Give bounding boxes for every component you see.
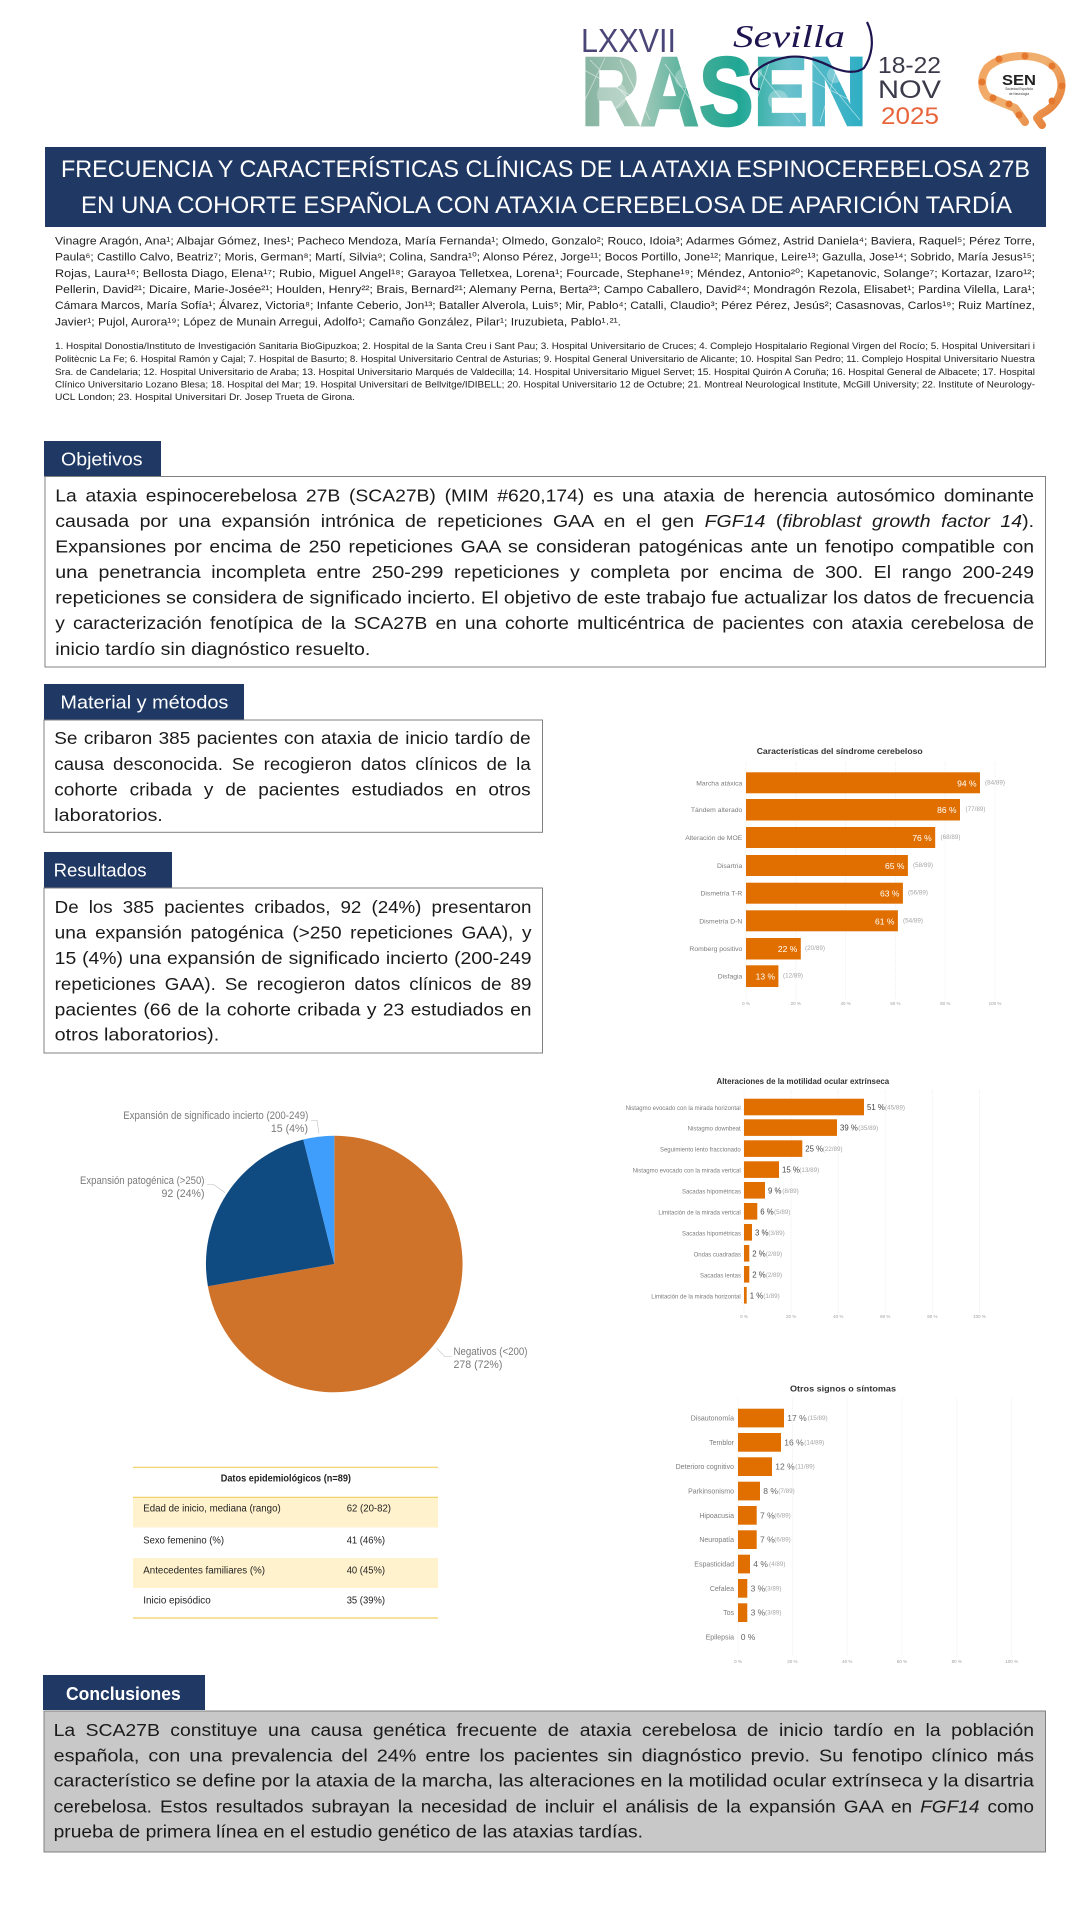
bar: marcha atáxica: (84/89) bbox=[985, 779, 1005, 786]
text: resultados body: De los 385 pacientes cribados, 92 (24%) presentaron bbox=[55, 897, 531, 917]
axis: chart 2 ticks: 20 % bbox=[786, 1314, 796, 1319]
authors: Pellerin, David²¹; Dicaire, Marie-Josée²¹; Houlden, Henry²²; Brais, Bernard²¹; Alemany Perna, Berta²³; Campo Caballero, David²⁴; Mondragón Rezola, Elisabet¹; Pardina Vilella, Lara¹; bbox=[55, 284, 1035, 296]
affiliations bbox=[55, 341, 1036, 402]
authors: Paula⁶; Castillo Calvo, Beatriz⁷; Moris, German⁸; Martí, Silvia⁹; Colina, Sandra¹⁰; Alonso Pérez, Jorge¹¹; Bocos Portillo, Jone¹²; Manrique, Leire¹³; Gazulla, Jose¹⁴; Sobrido, María Jesus¹⁵; bbox=[55, 252, 1035, 264]
bar: sacadas lentas: Sacadas lentas bbox=[700, 1273, 741, 1279]
affiliations: Clínico Universitario Lozano Blesa; 18. Hospital del Mar; 19. Hospital Universitari de Bellvitge/IDIBELL; 20. Hospital Universitario 12 de Octubre; 21. Montreal Neurological Institute, McGill University; 22. Institute of Neurology- bbox=[55, 380, 1035, 390]
heading: resultados bbox=[44, 852, 172, 888]
label: negativos bbox=[437, 1346, 528, 1371]
chart: otros signos o síntomas: Otros signos o síntomas bbox=[790, 1384, 896, 1394]
label: expansión de significado incierto: Expansión de significado incierto (200-249) bbox=[123, 1110, 308, 1122]
affiliations: Politècnic La Fe; 6. Hospital Ramón y Cajal; 7. Hospital de Basurto; 8. Hospital Universitario Central de Asturias; 9. Hospital General Universitario de Alicante; 10. Hospital San Pedro; 11. Complejo Hospital Universitario Nuestra bbox=[55, 354, 1036, 364]
bar: romberg positivo: Romberg positivo bbox=[689, 946, 743, 953]
bar: nistagmo evocado horizontal bbox=[626, 1099, 905, 1115]
bar: sacadas hipométricas 2: 3 % bbox=[755, 1228, 769, 1237]
axis: chart 1 ticks bbox=[742, 1001, 1001, 1006]
logo: LXXVII RASEN Sevilla congress: RASEN bbox=[581, 37, 867, 146]
heading: material y métodos bbox=[44, 684, 244, 720]
logo: SEN brain bbox=[978, 52, 1066, 125]
bar: sacadas hipométricas 2: (3/89) bbox=[768, 1230, 785, 1237]
text: material y métodos body bbox=[54, 728, 531, 825]
logo: LXXVII RASEN Sevilla congress: Sevilla bbox=[733, 18, 845, 54]
bar: romberg positivo: (20/89) bbox=[805, 945, 825, 952]
panel: objetivos bbox=[44, 441, 1046, 667]
table: datos epidemiológicos: 40 (45%) bbox=[347, 1565, 385, 1576]
text: resultados body bbox=[55, 897, 532, 1045]
bar: seguimiento lento fraccionado: 25 % bbox=[805, 1145, 823, 1154]
axis: chart 2 ticks: 60 % bbox=[880, 1314, 890, 1319]
bar: disautonomía: 17 % bbox=[787, 1413, 807, 1423]
bar: dismetría T-R: (56/89) bbox=[908, 890, 928, 897]
axis: chart 3 ticks: 0 % bbox=[734, 1659, 742, 1664]
bar: tándem alterado: 86 % bbox=[937, 805, 957, 815]
chart: alteraciones de la motilidad ocular extrínseca bbox=[626, 1076, 986, 1319]
bar: dismetría T-R: 63 % bbox=[880, 889, 900, 899]
bar: espasticidad: Espasticidad bbox=[694, 1562, 734, 1568]
axis: chart 3 ticks bbox=[734, 1659, 1018, 1664]
bar: cefalea: Cefalea bbox=[710, 1586, 734, 1593]
bar: limitación mirada vertical: Limitación de la mirada vertical bbox=[658, 1210, 741, 1216]
bar: temblor: Temblor bbox=[709, 1440, 735, 1447]
logo: SEN brain: SEN bbox=[1002, 72, 1036, 89]
text: material y métodos body: causa desconocida. Se recogieron datos clínicos de la bbox=[54, 754, 531, 774]
chart: otros signos o síntomas bbox=[676, 1384, 1018, 1664]
text: objetivos body: La ataxia espinocerebelosa 27B (SCA27B) (MIM #620,174) es una ataxia de herencia autosómico dominante bbox=[55, 485, 1034, 505]
bar: sacadas lentas: (2/89) bbox=[766, 1272, 782, 1279]
text: objetivos body: inicio tardío sin diagnóstico resuelto. bbox=[55, 639, 370, 659]
chart: características del síndrome cerebeloso bbox=[685, 746, 1005, 1006]
title banner bbox=[45, 147, 1046, 227]
bar: cefalea bbox=[710, 1579, 781, 1598]
bar: tos: Tos bbox=[723, 1610, 734, 1617]
bar: nistagmo downbeat bbox=[688, 1119, 878, 1136]
bar: neuropatía: (6/89) bbox=[774, 1537, 791, 1544]
bar: epilepsia bbox=[706, 1632, 756, 1642]
label: expansión patogénica: Expansión patogénica (>250) bbox=[80, 1175, 204, 1187]
text: objetivos body: una penetrancia incompleta entre 250-299 repeticiones y completa por encima de 300. El rango 200-249 bbox=[55, 562, 1034, 582]
bar: dismetría T-R: Dismetría T-R bbox=[701, 891, 742, 898]
panel: material y métodos bbox=[44, 684, 542, 832]
bar: temblor: 16 % bbox=[784, 1437, 804, 1447]
bar: hipoacusia: (6/89) bbox=[774, 1512, 791, 1519]
bar: epilepsia: Epilepsia bbox=[706, 1634, 734, 1642]
bar: espasticidad: 4 % bbox=[753, 1559, 768, 1569]
table: datos epidemiológicos: Antecedentes familiares (%) bbox=[143, 1565, 265, 1576]
bar: deterioro cognitivo: (11/89) bbox=[795, 1464, 815, 1471]
bar: nistagmo evocado vertical: 15 % bbox=[782, 1166, 800, 1175]
axis: chart 2 ticks: 100 % bbox=[973, 1314, 986, 1319]
bar: disfagia: Disfagia bbox=[718, 973, 743, 980]
text: resultados body: una expansión patogénica (>250 repeticiones GAA), y bbox=[55, 923, 532, 943]
axis: chart 3 ticks: 20 % bbox=[787, 1659, 798, 1664]
label: negativos: Negativos (<200) bbox=[454, 1346, 528, 1358]
label: expansión de significado incierto: 15 (4%) bbox=[271, 1123, 308, 1135]
bar: cefalea: 3 % bbox=[751, 1583, 766, 1593]
bar: tándem alterado bbox=[691, 799, 985, 820]
logo: SEN brain: Sociedad Española bbox=[1005, 87, 1033, 91]
affiliations: Sra. de Candelaria; 12. Hospital Universitario de Araba; 13. Hospital Universitario Marqués de Valdecilla; 14. Hospital Universitario Miguel Servet; 15. Hospital Quirón A Coruña; 16. Hospital General de Albacete; 17. Hospital bbox=[55, 367, 1035, 377]
bar: nistagmo evocado vertical: (13/89) bbox=[799, 1167, 819, 1174]
bar: tándem alterado: (77/89) bbox=[966, 806, 985, 813]
bar: romberg positivo bbox=[689, 938, 825, 960]
bar: parkinsonismo bbox=[688, 1482, 795, 1500]
bar: ondas cuadradas: (2/89) bbox=[766, 1251, 782, 1258]
bar: dismetría T-R bbox=[701, 883, 928, 904]
axis: chart 2 ticks bbox=[740, 1314, 986, 1319]
axis: chart 1 ticks: 0 % bbox=[742, 1001, 750, 1006]
bar: ondas cuadradas: Ondas cuadradas bbox=[694, 1252, 741, 1258]
bar: sacadas hipométricas: 9 % bbox=[768, 1186, 782, 1195]
slice: expansión patogénica bbox=[206, 1140, 334, 1286]
authors: Rojas, Laura¹⁶; Bellosta Diago, Elena¹⁷; Rubio, Miguel Angel¹⁸; Garayoa Telletxea, Lorena¹; Fourcade, Stephane¹⁹; Méndez, Antonio²⁰; Kapetanovic, Solange⁷; Kortazar, Izaro¹²; bbox=[55, 268, 1035, 280]
bar: tos: 3 % bbox=[751, 1608, 766, 1618]
bar: ondas cuadradas: 2 % bbox=[752, 1249, 766, 1258]
axis: chart 3 ticks: 60 % bbox=[897, 1659, 907, 1664]
bar: neuropatía: Neuropatía bbox=[699, 1537, 734, 1544]
bar: sacadas hipométricas: (8/89) bbox=[782, 1188, 799, 1195]
table: datos epidemiológicos: 41 (46%) bbox=[347, 1535, 385, 1546]
bar: epilepsia: 0 % bbox=[741, 1632, 756, 1642]
bar: hipoacusia: Hipoacusia bbox=[699, 1513, 734, 1520]
chart: alteraciones de la motilidad ocular extrínseca: Alteraciones de la motilidad ocular extrínseca bbox=[716, 1076, 889, 1086]
axis: chart 2 ticks: 0 % bbox=[740, 1314, 748, 1319]
axis: chart 1 ticks: 60 % bbox=[890, 1001, 901, 1006]
bar: tándem alterado: Tándem alterado bbox=[691, 807, 743, 814]
text: conclusiones body: La SCA27B constituye una causa genética frecuente de ataxia cerebelosa de inicio tardío en la población bbox=[54, 1720, 1034, 1740]
table: datos epidemiológicos bbox=[133, 1467, 438, 1618]
text: objetivos body: Expansiones por encima de 250 repeticiones GAA se consideran patogénicas ante un fenotipo compatible con bbox=[55, 536, 1034, 556]
bar: alteración de MOE: 76 % bbox=[912, 833, 932, 843]
table: datos epidemiológicos: 62 (20-82) bbox=[347, 1504, 391, 1515]
bar: disautonomía: Disautonomía bbox=[691, 1416, 734, 1422]
bar: limitación mirada horizontal bbox=[651, 1287, 780, 1304]
table: datos epidemiológicos: 35 (39%) bbox=[347, 1595, 385, 1606]
bar: sacadas lentas: 2 % bbox=[752, 1270, 766, 1279]
bar: disfagia: (12/89) bbox=[783, 972, 803, 979]
bar: dismetría D-N: (54/89) bbox=[903, 917, 923, 924]
slice: negativos bbox=[208, 1136, 463, 1392]
bar: limitación mirada vertical: (5/89) bbox=[774, 1209, 790, 1216]
bar: sacadas hipométricas: Sacadas hipométricas bbox=[682, 1189, 741, 1195]
title banner: EN UNA COHORTE ESPAÑOLA CON ATAXIA CEREBELOSA DE APARICIÓN TARDÍA bbox=[81, 192, 1012, 219]
heading: conclusiones: Conclusiones bbox=[66, 1683, 181, 1704]
bar: nistagmo evocado vertical bbox=[633, 1161, 819, 1178]
bar: sacadas hipométricas bbox=[682, 1182, 799, 1199]
text: conclusiones body: característico se define por la ataxia de la marcha, las alteraciones en la motilidad ocular extrínseca y la disartria bbox=[54, 1771, 1034, 1791]
text: conclusiones body: española, con una prevalencia del 24% entre los pacientes sin diagnóstico previo. Su fenotipo clínico más bbox=[54, 1745, 1034, 1765]
text: conclusiones body bbox=[54, 1720, 1034, 1842]
bar: cefalea: (3/89) bbox=[765, 1585, 781, 1592]
bar: disfagia bbox=[718, 965, 803, 987]
logo: LXXVII RASEN Sevilla congress: NOV bbox=[878, 76, 941, 104]
bar: nistagmo evocado horizontal: Nistagmo evocado con la mirada horizontal bbox=[626, 1106, 741, 1112]
authors: Vinagre Aragón, Ana¹; Albajar Gómez, Ines¹; Pacheco Mendoza, María Fernanda¹; Olmedo, Gonzalo²; Rouco, Idoia³; Adarmes Gómez, Astrid Daniela⁴; Baviera, Raquel⁵; Pérez Torre, bbox=[55, 236, 1035, 248]
title banner: FRECUENCIA Y CARACTERÍSTICAS CLÍNICAS DE LA ATAXIA ESPINOCEREBELOSA 27B bbox=[61, 156, 1030, 183]
bar: alteración de MOE bbox=[685, 827, 960, 848]
text: material y métodos body: Se cribaron 385 pacientes con ataxia de inicio tardío de bbox=[54, 728, 531, 748]
bar: disautonomía: (15/89) bbox=[808, 1415, 828, 1422]
bar: hipoacusia: 7 % bbox=[760, 1510, 775, 1520]
axis: chart 1 ticks: 40 % bbox=[840, 1001, 851, 1006]
bar: seguimiento lento fraccionado: (22/89) bbox=[823, 1146, 843, 1153]
axis: chart 2 ticks: 80 % bbox=[927, 1314, 938, 1319]
authors bbox=[55, 236, 1035, 328]
bar: seguimiento lento fraccionado bbox=[660, 1140, 843, 1157]
chart: pie cohort bbox=[80, 1110, 528, 1392]
text: resultados body: pacientes (66 de la cohorte cribada y 23 estudiados en bbox=[55, 999, 531, 1019]
bar: parkinsonismo: Parkinsonismo bbox=[688, 1488, 734, 1496]
bar: dismetría D-N: Dismetría D-N bbox=[699, 918, 742, 925]
bar: parkinsonismo: (7/89) bbox=[778, 1488, 795, 1495]
authors: Javier¹; Pujol, Aurora¹⁹; López de Munain Arregui, Adolfo¹; Camaño González, Pilar¹; Iruzubieta, Pablo¹˒²¹. bbox=[55, 316, 621, 328]
bar: dismetría D-N: 61 % bbox=[875, 916, 895, 926]
bar: deterioro cognitivo: 12 % bbox=[775, 1462, 795, 1472]
bar: nistagmo downbeat: 39 % bbox=[840, 1124, 858, 1133]
slice: expansión de significado incierto bbox=[303, 1136, 334, 1264]
panel: conclusiones bbox=[43, 1675, 1046, 1852]
logo: LXXVII RASEN Sevilla congress: LXXVII bbox=[581, 22, 676, 59]
text: objetivos body bbox=[55, 485, 1034, 659]
heading: resultados: Resultados bbox=[54, 860, 147, 881]
bar: seguimiento lento fraccionado: Seguimiento lento fraccionado bbox=[660, 1148, 741, 1154]
bar: marcha atáxica: Marcha atáxica bbox=[696, 780, 743, 787]
bar: parkinsonismo: 8 % bbox=[763, 1486, 778, 1496]
heading: conclusiones bbox=[43, 1675, 205, 1710]
bar: alteración de MOE: Alteración de MOE bbox=[685, 835, 743, 842]
table: datos epidemiológicos: Inicio episódico bbox=[143, 1595, 211, 1606]
bar: nistagmo downbeat: Nistagmo downbeat bbox=[688, 1127, 741, 1133]
affiliations: UCL London; 23. Hospital Universitari Dr. Josep Trueta de Girona. bbox=[55, 392, 355, 402]
bar: disartria: Disartria bbox=[717, 863, 743, 870]
bar: limitación mirada vertical bbox=[658, 1203, 790, 1220]
bar: espasticidad: (4/89) bbox=[769, 1561, 785, 1568]
text: objetivos body: repeticiones se considera de significado incierto. El objetivo de este trabajo fue actualizar los datos de frecuencia bbox=[55, 587, 1034, 607]
axis: chart 3 ticks: 100 % bbox=[1005, 1659, 1018, 1664]
chart: características del síndrome cerebeloso: Características del síndrome cerebeloso bbox=[757, 746, 923, 756]
bar: tos bbox=[723, 1603, 781, 1622]
heading: objetivos: Objetivos bbox=[61, 449, 142, 470]
bar: neuropatía bbox=[699, 1530, 791, 1549]
label: expansión de significado incierto bbox=[123, 1110, 319, 1135]
logo: LXXVII RASEN Sevilla congress: 2025 bbox=[881, 103, 939, 130]
bar: nistagmo evocado vertical: Nistagmo evocado con la mirada vertical bbox=[633, 1169, 741, 1175]
text: resultados body: repeticiones GAA). Se recogieron datos clínicos de 89 bbox=[55, 974, 531, 994]
text: material y métodos body: laboratorios. bbox=[54, 805, 163, 825]
logo: LXXVII RASEN Sevilla congress: 18-22 bbox=[878, 52, 941, 78]
axis: chart 3 ticks: 40 % bbox=[842, 1659, 852, 1664]
bar: sacadas hipométricas 2: Sacadas hipométricas bbox=[682, 1231, 741, 1237]
text: resultados body: 15 (4%) una expansión de significado incierto (200-249 bbox=[55, 948, 531, 968]
axis: chart 1 ticks: 100 % bbox=[989, 1001, 1001, 1006]
bar: disartria: 65 % bbox=[885, 861, 905, 871]
bar: sacadas hipométricas 2 bbox=[682, 1224, 785, 1241]
bar: tos: (3/89) bbox=[765, 1610, 781, 1617]
bar: disfagia: 13 % bbox=[756, 971, 775, 981]
bar: nistagmo evocado horizontal: 51 % bbox=[867, 1103, 885, 1112]
bar: alteración de MOE: (68/89) bbox=[940, 834, 960, 841]
bar: marcha atáxica bbox=[696, 772, 1005, 793]
axis: chart 1 ticks: 80 % bbox=[940, 1001, 950, 1006]
bar: temblor: (14/89) bbox=[804, 1439, 824, 1446]
bar: temblor bbox=[709, 1433, 824, 1452]
bar: ondas cuadradas bbox=[694, 1245, 782, 1262]
bar: disautonomía bbox=[691, 1409, 828, 1427]
logo: SEN brain: de Neurología bbox=[1009, 92, 1029, 96]
bar: neuropatía: 7 % bbox=[760, 1535, 775, 1545]
bar: limitación mirada vertical: 6 % bbox=[760, 1207, 774, 1216]
bar: limitación mirada horizontal: Limitación de la mirada horizontal bbox=[651, 1294, 741, 1300]
table: datos epidemiológicos: Datos epidemiológicos (n=89) bbox=[221, 1474, 351, 1485]
bar: deterioro cognitivo: Deterioro cognitivo bbox=[676, 1464, 734, 1471]
bar: deterioro cognitivo bbox=[676, 1457, 815, 1476]
bar: limitación mirada horizontal: 1 % bbox=[750, 1291, 763, 1300]
heading: objetivos bbox=[44, 441, 161, 476]
bar: marcha atáxica: 94 % bbox=[957, 778, 977, 788]
label: negativos: 278 (72%) bbox=[454, 1359, 502, 1371]
bar: sacadas lentas bbox=[700, 1266, 782, 1283]
bar: nistagmo evocado horizontal: (45/89) bbox=[885, 1104, 905, 1112]
text: objetivos body: causada por una expansión intrónica de repeticiones GAA en el gen FGF14 (fibroblast growth factor 14 ). bbox=[55, 511, 1034, 531]
label: expansión patogénica bbox=[80, 1175, 225, 1200]
axis: chart 3 ticks: 80 % bbox=[952, 1659, 962, 1664]
table: datos epidemiológicos: Sexo femenino (%) bbox=[143, 1535, 224, 1546]
bar: disartria: (58/89) bbox=[913, 862, 933, 869]
text: resultados body: otros laboratorios). bbox=[55, 1025, 219, 1045]
heading: material y métodos: Material y métodos bbox=[60, 691, 228, 712]
axis: chart 2 ticks: 40 % bbox=[833, 1314, 843, 1319]
affiliations: 1. Hospital Donostia/Instituto de Investigación Sanitaria BioGipuzkoa; 2. Hospital de la Santa Creu i Sant Pau; 3. Hospital Universitario de Cruces; 4. Complejo Hospitalario Regional Virgen del Rocío; 5. Hospital Universitari i bbox=[55, 341, 1035, 351]
panel: resultados bbox=[44, 852, 542, 1053]
text: conclusiones body: cerebelosa. Estos resultados subrayan la necesidad de incluir el análisis de la expansión GAA en FGF14 como bbox=[54, 1796, 1034, 1816]
authors: Cámara Marcos, María Sofía¹; Álvarez, Victoria⁸; Infante Ceberio, Jon¹³; Bataller Alverola, Luis⁵; Mir, Pablo⁴; Catalli, Claudio³; Pérez Pérez, Jesús²; Casasnovas, Carlos¹⁹; Ruiz Martínez, bbox=[55, 299, 1035, 312]
table: datos epidemiológicos: Edad de inicio, mediana (rango) bbox=[143, 1504, 281, 1515]
bar: nistagmo downbeat: (35/89) bbox=[858, 1125, 878, 1132]
bar: dismetría D-N bbox=[699, 910, 923, 931]
axis: chart 1 ticks: 20 % bbox=[791, 1001, 801, 1006]
text: conclusiones body: prueba de primera línea en el estudio genético de las ataxias tardías. bbox=[54, 1822, 643, 1842]
bar: hipoacusia bbox=[699, 1506, 791, 1525]
bar: limitación mirada horizontal: (1/89) bbox=[763, 1293, 780, 1300]
bar: romberg positivo: 22 % bbox=[778, 944, 798, 954]
text: material y métodos body: cohorte cribada y de pacientes estudiados en otros bbox=[54, 779, 531, 799]
bar: disartria bbox=[717, 855, 933, 876]
label: expansión patogénica: 92 (24%) bbox=[162, 1188, 204, 1200]
text: objetivos body: y caracterización fenotípica de la SCA27B en una cohorte multicéntrica de pacientes con ataxia cerebelosa de bbox=[55, 613, 1034, 633]
bar: espasticidad bbox=[694, 1555, 785, 1573]
